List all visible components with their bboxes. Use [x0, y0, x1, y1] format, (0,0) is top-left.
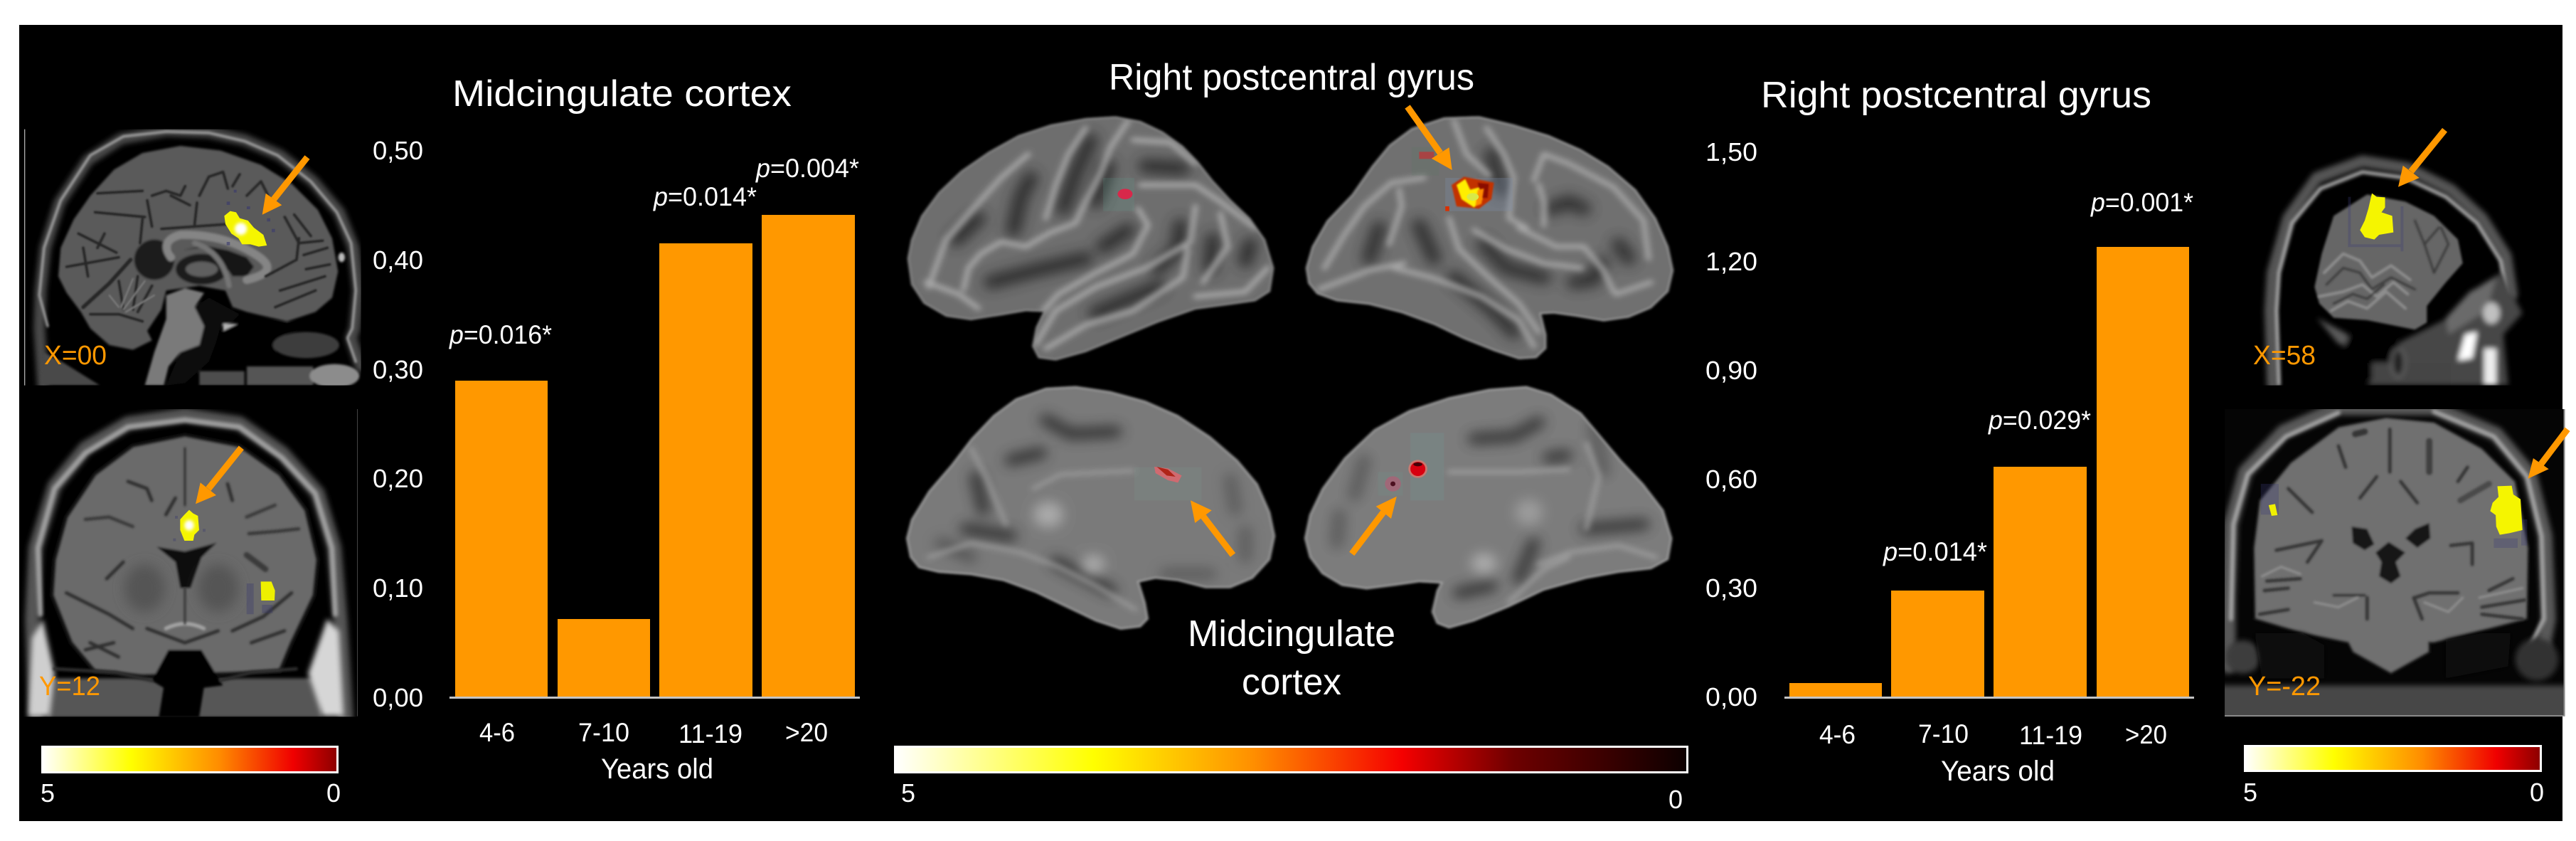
arrow: coronal MRI	[196, 448, 241, 504]
colour scale left: 0	[326, 778, 341, 808]
slice label Y=12: Y=12	[39, 672, 100, 702]
colour scale left: 5	[41, 778, 55, 808]
p values: p=0.016*	[449, 320, 552, 349]
slice label X=00: X=00	[44, 341, 107, 371]
heading: Right postcentral gyrus: Right postcentral gyrus	[1761, 75, 2151, 116]
bars	[1789, 247, 2189, 697]
y axis labels	[373, 136, 423, 712]
panel: coronal MRI Y=-22	[2219, 408, 2576, 721]
p values	[449, 154, 859, 349]
x axis labels	[479, 718, 828, 785]
slice label X=58: X=58	[2253, 341, 2316, 371]
x axis labels: Years old	[1941, 756, 2055, 787]
colour scale left	[41, 747, 341, 808]
activation: left medial	[1134, 467, 1202, 500]
activation blobs	[2261, 484, 2527, 548]
activation blob	[224, 190, 275, 247]
arrow: right lateral	[1407, 107, 1452, 170]
y axis labels: 0,10	[373, 573, 423, 603]
colour scale right: 0	[2530, 778, 2544, 807]
label: Midcingulate cortex centre	[1188, 613, 1395, 703]
panel: sagittal MRI X=00	[24, 129, 361, 388]
label: Midcingulate cortex centre: Midcingulate	[1188, 613, 1395, 655]
x axis labels: 4-6	[1819, 720, 1856, 749]
p values: p=0.014*	[653, 182, 757, 211]
brain surface: right medial	[1303, 384, 1674, 630]
colour scale right: 5	[2243, 778, 2257, 807]
arrow: left medial	[1191, 500, 1233, 555]
bar chart: right postcentral gyrus	[1705, 137, 2194, 787]
y axis labels: 1,50	[1705, 137, 1757, 166]
panel: coronal MRI Y=12	[28, 409, 358, 717]
brain surface: left lateral	[905, 115, 1276, 362]
colour scale centre: 5	[901, 778, 915, 808]
y axis labels: 1,20	[1705, 247, 1757, 276]
activation: left lateral	[1103, 178, 1134, 211]
y axis labels: 0,40	[373, 245, 423, 275]
y axis labels: 0,00	[1705, 682, 1757, 712]
p values: p=0.004*	[755, 154, 859, 183]
colour scale centre: 0	[1668, 785, 1683, 814]
arrow: sagittal MRI	[262, 157, 307, 215]
y axis labels: 0,90	[1705, 356, 1757, 385]
p values: p=0.029*	[1988, 406, 2091, 435]
x axis labels: 4-6	[479, 718, 515, 747]
panel: sagittal MRI X=58	[2270, 162, 2523, 386]
label: Midcingulate cortex centre: cortex	[1242, 662, 1341, 703]
y axis labels: 0,30	[373, 355, 423, 384]
y axis labels: 0,20	[373, 464, 423, 493]
colour scale centre	[895, 747, 1687, 814]
arrow: coronal MRI right	[2528, 429, 2567, 479]
y axis labels: 0,50	[373, 136, 423, 165]
brain surface: right lateral	[1304, 115, 1676, 361]
bar chart: midcingulate cortex	[373, 136, 860, 785]
p values: p=0.001*	[2090, 188, 2193, 217]
y axis labels	[1705, 137, 1757, 712]
x axis labels: 11-19	[678, 719, 743, 749]
x axis labels: 7-10	[1918, 719, 1969, 749]
activation blobs	[173, 510, 275, 614]
x axis labels: >20	[785, 718, 828, 747]
arrow: sagittal MRI right	[2398, 130, 2445, 187]
x axis labels: Years old	[601, 753, 713, 785]
heading: Midcingulate cortex: Midcingulate cortex	[452, 73, 792, 115]
bars	[455, 215, 855, 697]
x axis labels: >20	[2125, 720, 2167, 749]
x axis labels: 7-10	[578, 718, 629, 747]
y axis labels: 0,00	[373, 683, 423, 712]
slice label Y=-22: Y=-22	[2248, 672, 2321, 702]
activation blob	[2348, 194, 2403, 251]
x axis labels: 11-19	[2019, 721, 2082, 750]
activation: right medial	[1378, 433, 1444, 500]
activation: right lateral	[1412, 147, 1513, 211]
heading: Right postcentral gyrus centre: Right postcentral gyrus	[1109, 57, 1474, 98]
p values	[1883, 188, 2193, 566]
y axis labels: 0,30	[1705, 573, 1757, 603]
x axis labels	[1819, 719, 2167, 787]
y axis labels: 0,60	[1705, 465, 1757, 494]
p values: p=0.014*	[1883, 537, 1987, 566]
arrow: right medial	[1352, 497, 1397, 554]
brain surface: left medial	[905, 384, 1277, 632]
colour scale right	[2243, 746, 2544, 807]
